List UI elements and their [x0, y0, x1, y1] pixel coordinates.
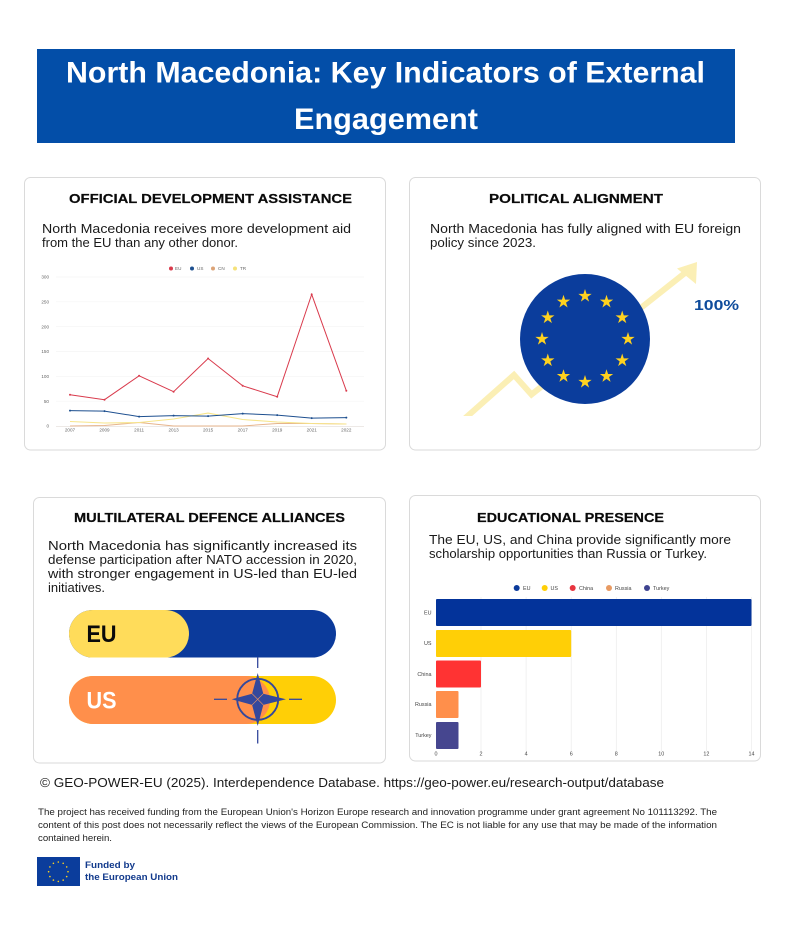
- bar chart: scholarships by donor: 12: [703, 752, 709, 758]
- text block: scholarships: [429, 533, 731, 561]
- panel: multilateral defence alliances: [34, 498, 386, 763]
- heading: educational presence: EDUCATIONAL PRESENCE: [477, 510, 664, 525]
- bar chart: scholarships by donor: EU: [424, 610, 432, 616]
- heading: political alignment: POLITICAL ALIGNMENT: [489, 191, 663, 206]
- panel: official development assistance: [24, 178, 386, 450]
- icon: rising arrow: [462, 262, 697, 421]
- bar chart: scholarships by donor: China: [417, 672, 432, 678]
- line chart: aid by donor: 2022: [341, 428, 352, 432]
- text block: scholarships: The EU, US, and China provide significantly more: [429, 533, 731, 547]
- panel: educational presence: [410, 496, 760, 761]
- text block: development aid: from the EU than any other donor.: [42, 236, 238, 250]
- chart legend: Russia: [615, 586, 631, 592]
- text block: development aid: North Macedonia receives more development aid: [42, 222, 351, 236]
- funded by EU logo: [37, 857, 178, 886]
- text block: development aid: [42, 222, 351, 250]
- title: North Macedonia: Key Indicators of External: [66, 56, 705, 90]
- text block: NATO accession: North Macedonia has significantly increased its: [48, 539, 357, 553]
- line chart: aid by donor: 2015: [203, 428, 214, 432]
- chart legend: Turkey: [653, 586, 670, 592]
- line chart: aid by donor: 2013: [168, 428, 179, 432]
- stat: 100%: 100%: [694, 297, 739, 314]
- line chart: aid by donor: 200: [41, 324, 49, 329]
- chart legend: TR: [240, 266, 247, 271]
- line chart: aid by donor: 250: [41, 299, 49, 304]
- bar chart: scholarships by donor: Turkey: [415, 733, 432, 739]
- source line: © GEO-POWER-EU (2025). Interdependence Database. https://geo-power.eu/research-output/database: [40, 775, 664, 790]
- bar chart: scholarships by donor: 2: [480, 752, 482, 758]
- bar: EU engagement: [69, 610, 336, 658]
- line chart: aid by donor: 2007: [65, 428, 76, 432]
- bar chart: scholarships by donor: 14: [748, 752, 754, 758]
- chart legend: [514, 585, 670, 592]
- bar: EU engagement: EU: [86, 621, 116, 648]
- chart legend: US: [197, 266, 203, 271]
- chart legend: EU: [523, 586, 531, 592]
- logo text: the European Union: [85, 872, 178, 883]
- funding disclaimer: contained herein.: [38, 833, 112, 843]
- text block: NATO accession: defense participation after NATO accession in 2020,: [48, 553, 357, 567]
- bar chart: scholarships by donor: 0: [434, 752, 438, 758]
- logo text: Funded by: [85, 860, 136, 871]
- line chart: aid by donor: [41, 266, 364, 432]
- text block: foreign policy alignment: North Macedonia has fully aligned with EU foreign: [430, 222, 741, 236]
- text block: foreign policy alignment: [430, 222, 741, 250]
- line chart: aid by donor: 2021: [307, 428, 317, 432]
- line chart: aid by donor: 100: [41, 374, 49, 379]
- text block: foreign policy alignment: policy since 2023.: [430, 236, 536, 250]
- chart legend: CN: [218, 266, 225, 271]
- funding disclaimer: [38, 807, 717, 843]
- icon: EU flag circle: [520, 274, 650, 404]
- chart legend: China: [579, 586, 593, 592]
- title: [37, 49, 735, 143]
- text block: NATO accession: [47, 539, 357, 595]
- bar: US engagement: [69, 676, 336, 724]
- heading: official development assistance: OFFICIAL DEVELOPMENT ASSISTANCE: [69, 191, 352, 206]
- bar chart: scholarships by donor: 4: [525, 752, 528, 758]
- bar chart: scholarships by donor: Russia: [415, 702, 432, 708]
- bar: US engagement: US: [86, 688, 116, 714]
- text block: scholarships: scholarship opportunities than Russia or Turkey.: [429, 547, 707, 561]
- funding disclaimer: The project has received funding from the European Union's Horizon Europe research and innovation programme under grant agreement No 101113292. The: [38, 807, 717, 817]
- bar chart: scholarships by donor: US: [424, 641, 432, 647]
- line chart: aid by donor: 2019: [272, 428, 283, 432]
- line chart: aid by donor: 2017: [238, 428, 248, 432]
- panel: political alignment: [410, 178, 760, 450]
- line chart: aid by donor: 0: [46, 424, 49, 429]
- logo text: [85, 860, 178, 883]
- text block: NATO accession: with stronger engagement in US-led than EU-led: [47, 567, 357, 581]
- chart legend: US: [550, 586, 558, 592]
- bar chart: scholarships by donor: 6: [570, 752, 573, 758]
- title: Engagement: [294, 103, 478, 136]
- line chart: aid by donor: 150: [41, 349, 49, 354]
- line chart: aid by donor: 300: [41, 275, 49, 280]
- chart legend: EU: [175, 266, 181, 271]
- line chart: aid by donor: 2009: [99, 428, 110, 432]
- bar chart: scholarships by donor: 10: [658, 752, 664, 758]
- line chart: aid by donor: 2011: [134, 428, 144, 432]
- funding disclaimer: content of this post does not necessarily reflect the views of the European Commission. The EC is not liable for any use that may be made of the information: [38, 820, 717, 830]
- line chart: aid by donor: 50: [44, 399, 49, 404]
- text block: NATO accession: initiatives.: [48, 581, 105, 595]
- icon: NATO compass star: [214, 657, 302, 744]
- bar chart: scholarships by donor: 8: [615, 752, 618, 758]
- bar chart: scholarships by donor: [415, 585, 754, 758]
- icon: EU flag: [37, 857, 80, 886]
- chart legend: [169, 266, 247, 271]
- heading: multilateral defence alliances: MULTILATERAL DEFENCE ALLIANCES: [74, 510, 345, 525]
